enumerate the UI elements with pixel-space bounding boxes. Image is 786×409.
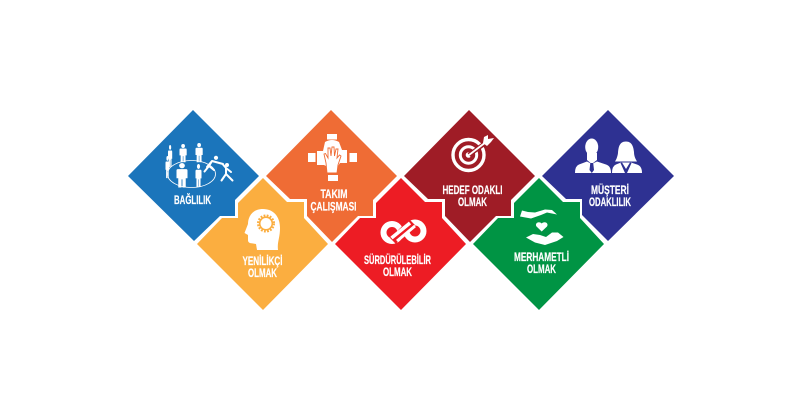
label: Yenilikçi Olmak: YENİLİKÇİ <box>242 253 282 268</box>
icon: hands with heart <box>520 210 564 245</box>
label: Takım Çalışması <box>310 187 356 214</box>
label: Sürdürülebilir Olmak <box>364 252 431 279</box>
label: Merhametli Olmak: MERHAMETLİ <box>514 249 569 264</box>
label: Takım Çalışması: TAKIM <box>320 187 348 201</box>
label: Hedef Odaklı Olmak: OLMAK <box>458 195 487 209</box>
label: Hedef Odaklı Olmak <box>442 183 502 209</box>
panel: Merhametli Olmak <box>473 178 604 310</box>
label: Sürdürülebilir Olmak: SÜRDÜRÜLEBİLİR <box>364 252 431 267</box>
panel: Hedef Odaklı Olmak <box>404 110 535 242</box>
panel: Bağlılık <box>128 110 259 241</box>
panel: Yenilikçi Olmak <box>197 178 328 310</box>
icon: people circle <box>166 143 232 188</box>
icon: chain link <box>384 222 424 241</box>
label: Sürdürülebilir Olmak: OLMAK <box>383 265 412 279</box>
panel: Takım Çalışması <box>266 110 397 242</box>
icon: target with arrow <box>453 135 494 170</box>
label: Yenilikçi Olmak <box>242 253 282 280</box>
label: Müşteri Odaklılık <box>589 182 631 209</box>
label: Yenilikçi Olmak: OLMAK <box>248 266 277 280</box>
icon: head with gear <box>244 209 280 250</box>
panel: Sürdürülebilir Olmak <box>335 178 466 310</box>
label: Hedef Odaklı Olmak: HEDEF ODAKLI <box>442 183 502 197</box>
label: Bağlılık: BAĞLILIK <box>174 192 211 207</box>
label: Merhametli Olmak <box>514 249 569 276</box>
label: Merhametli Olmak: OLMAK <box>527 262 556 276</box>
icon: stacked hands <box>308 134 357 181</box>
label: Takım Çalışması: ÇALIŞMASI <box>310 200 356 214</box>
label: Müşteri Odaklılık: ODAKLILIK <box>589 195 631 209</box>
panel: Müşteri Odaklılık <box>542 110 674 241</box>
icon: man and woman <box>575 138 642 173</box>
label: Müşteri Odaklılık: MÜŞTERİ <box>591 182 629 197</box>
